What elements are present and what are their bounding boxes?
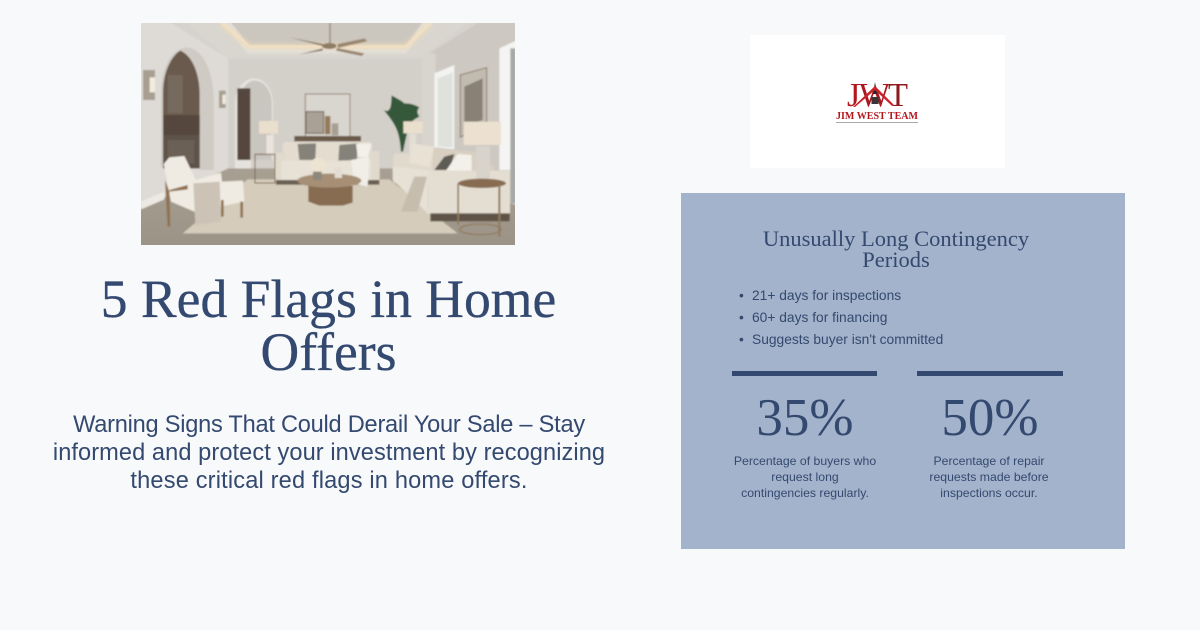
center sofa: [283, 142, 372, 162]
curtain: [422, 53, 436, 148]
wall art: [460, 68, 487, 137]
stat: 50%: [917, 371, 1063, 500]
title: 5 Red Flags in Home: [101, 269, 556, 329]
back wall: [228, 58, 422, 170]
plant: [384, 95, 419, 152]
rug: [183, 179, 458, 233]
title: Offers: [261, 322, 396, 382]
stat: 50%: 50%: [941, 389, 1039, 447]
panel: contingency periods: [681, 193, 1125, 549]
panel heading: Unusually Long Contingency: [763, 226, 1029, 251]
window: [434, 65, 454, 149]
mirror and console: [305, 94, 350, 137]
stat: 35%: contingencies regularly.: [741, 486, 869, 500]
side table: [458, 179, 506, 188]
right lamp front: [476, 147, 490, 183]
stat: 35%: 35%: [756, 389, 854, 447]
logo: Jim West Team: T: [888, 77, 908, 114]
subtitle: informed and protect your investment by recognizing: [53, 440, 605, 466]
subtitle: [53, 412, 605, 494]
bullet list: 60+ days for financing: [752, 310, 887, 325]
left wall: [131, 10, 228, 212]
stat: 50%: Percentage of repair: [933, 454, 1044, 468]
photo: living room interior: [141, 23, 515, 245]
bullet list: Suggests buyer isn't committed: [752, 332, 943, 347]
stat: 50%: inspections occur.: [940, 486, 1038, 500]
coffee table: [308, 186, 353, 206]
stat: 35%: [732, 371, 877, 500]
stat: 35%: request long: [771, 470, 839, 484]
bullet list: •: [739, 288, 744, 303]
floor: [131, 168, 528, 257]
center lamp: [266, 135, 274, 154]
sconces: [143, 70, 155, 100]
ceiling: [171, 10, 484, 58]
left arch: [161, 47, 214, 170]
ceiling fan: [289, 23, 367, 56]
armchair: [164, 156, 244, 212]
panel heading: Periods: [862, 247, 930, 272]
bullet list: •: [739, 310, 744, 325]
right wall: [422, 10, 528, 210]
subtitle: these critical red flags in home offers.: [130, 468, 528, 494]
middle arch: [235, 78, 273, 168]
bullet list: •: [739, 332, 744, 347]
logo card: [750, 35, 1005, 168]
subtitle: Warning Signs That Could Derail Your Sale – Stay: [73, 412, 585, 438]
bullet list: [739, 288, 943, 347]
baseboard: [141, 192, 164, 209]
logo: Jim West Team: W: [859, 77, 891, 114]
bullet list: 21+ days for inspections: [752, 288, 901, 303]
logo: Jim West Team: [836, 77, 918, 123]
stat: 35%: Percentage of buyers who: [734, 454, 876, 468]
right sofa: [393, 153, 433, 183]
panel heading: [763, 226, 1030, 272]
right lamp back: [409, 134, 416, 153]
stat: 50%: requests made before: [929, 470, 1049, 484]
logo: Jim West Team: J: [847, 77, 860, 114]
logo: Jim West Team: JIM WEST TEAM: [836, 111, 918, 122]
title: [101, 269, 556, 382]
